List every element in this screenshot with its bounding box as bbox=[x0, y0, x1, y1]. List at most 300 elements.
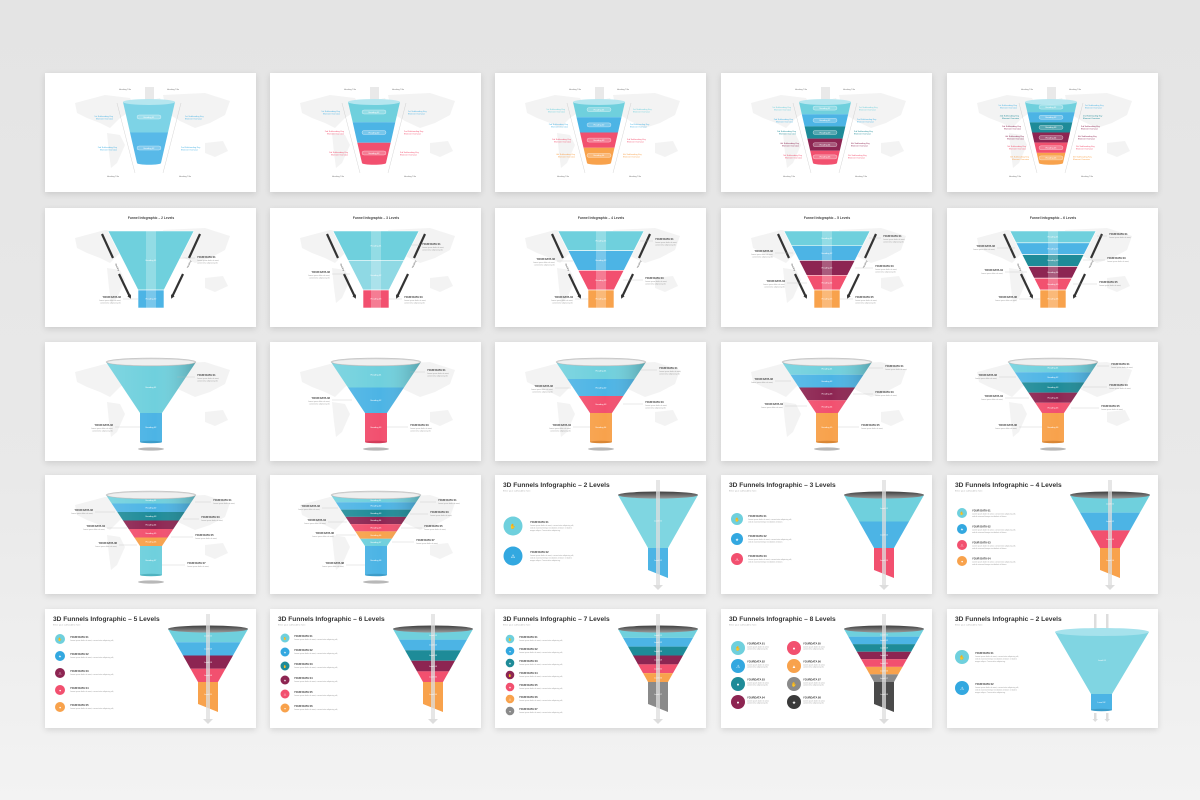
funnel: Level 01 bbox=[204, 636, 213, 638]
arrows bbox=[327, 234, 425, 297]
title: 3D Funnels Infographic – 7 Levels bbox=[503, 616, 610, 623]
data labels: Lorem ipsum dolor sit amet, bbox=[308, 400, 330, 403]
icon list: YOURDATA 08 bbox=[803, 696, 821, 700]
data labels: Lorem ipsum dolor sit amet, bbox=[213, 502, 236, 505]
funnel bbox=[844, 480, 924, 590]
icon list: ● bbox=[59, 688, 61, 692]
funnel: Heading 03 bbox=[146, 516, 157, 518]
data labels: Lorem ipsum dolor sit amet, bbox=[551, 299, 573, 302]
data labels: Lorem ipsum dolor sit amet, bbox=[549, 427, 571, 430]
data labels: YOUR DATA 01 bbox=[422, 242, 441, 246]
icon list: ⚠ bbox=[284, 692, 287, 696]
funnel: Heading 03 bbox=[596, 404, 607, 406]
side labels: Element Overview bbox=[782, 144, 799, 148]
data labels: YOUR DATA 05 bbox=[424, 524, 443, 528]
funnel bbox=[799, 87, 851, 165]
funnel: Level 08 bbox=[880, 694, 889, 696]
title: 3D Funnels Infographic – 2 Levels bbox=[955, 616, 1062, 623]
side labels: Element Overview bbox=[181, 148, 198, 152]
icon list: YOUR DATA 06 bbox=[294, 704, 313, 708]
title: Enter your subheadline here bbox=[729, 624, 757, 626]
data labels: Lorem ipsum dolor sit amet, bbox=[422, 246, 445, 249]
funnel bbox=[1025, 87, 1077, 165]
icon list: Lorem ipsum dolor sit amet, consectetur adipiscing elit, bbox=[519, 711, 563, 714]
data labels: consectetur adipiscing elit. bbox=[92, 429, 113, 432]
icon list: consectetur adipiscing elit, bbox=[803, 684, 825, 687]
side labels: 1st Subheading Key bbox=[772, 106, 792, 109]
funnel: Level 04 bbox=[1106, 560, 1115, 562]
slide: row1 col2 world funnel 3 levels bbox=[270, 73, 481, 192]
side labels: 2nd Subheading Key bbox=[630, 124, 650, 126]
title: 3D Funnels Infographic – 6 Levels bbox=[278, 616, 385, 623]
arrows: Heading bbox=[637, 260, 643, 268]
side labels: Element Overview bbox=[551, 126, 568, 128]
data labels: Lorem ipsum dolor sit amet, bbox=[761, 406, 783, 409]
side labels: 1st Subheading Key bbox=[185, 115, 205, 118]
icon list: sed do eiusmod tempor incididunt ut labore. bbox=[748, 520, 783, 524]
funnel: Heading 04 bbox=[1048, 272, 1059, 274]
data labels: YOUR DATA 04 bbox=[554, 295, 574, 299]
funnel: Heading 02 bbox=[596, 260, 607, 262]
data labels: YOUR DATA 02 bbox=[754, 249, 774, 253]
funnel: Heading 05 bbox=[1048, 408, 1059, 410]
title: 3D Funnels Infographic – 3 Levels bbox=[729, 482, 836, 489]
icon list: consectetur adipiscing elit, bbox=[803, 648, 825, 651]
funnel: Heading 01 bbox=[369, 112, 380, 114]
side labels bbox=[998, 88, 1105, 178]
icon list: ✋ bbox=[791, 681, 797, 687]
funnel bbox=[1010, 226, 1096, 310]
side labels: 1st Subheading Key bbox=[94, 115, 114, 118]
slide: row4 col4 3D funnels 3 levels bbox=[721, 475, 932, 594]
funnel: Heading 02 bbox=[820, 120, 831, 122]
title bbox=[955, 616, 1062, 626]
icon list: ● bbox=[737, 700, 740, 705]
funnel: Heading 05 bbox=[371, 528, 382, 530]
icon list: ✋ bbox=[735, 645, 741, 651]
funnel: Heading 01 bbox=[820, 108, 831, 110]
data labels: YOUR DATA 04 bbox=[764, 402, 784, 406]
slide: row2 col4 funnel 5 levels bbox=[721, 208, 932, 327]
icon list: Lorem ipsum dolor sit amet, consectetur adipiscing elit, bbox=[530, 554, 574, 557]
side labels: Element Overview bbox=[1012, 158, 1029, 161]
data labels: Lorem ipsum dolor sit amet, bbox=[195, 537, 218, 540]
funnel: Heading 02 bbox=[1048, 248, 1059, 250]
arrows bbox=[1004, 234, 1102, 297]
side labels: 3rd Subheading Key bbox=[400, 151, 420, 154]
icon list: ⚠ bbox=[960, 686, 964, 691]
side labels bbox=[94, 88, 205, 178]
data labels: YOUR DATA 08 bbox=[325, 561, 345, 565]
side labels: Heading Title bbox=[629, 175, 642, 178]
side labels: Element Overview bbox=[633, 110, 650, 114]
icon list: ★ bbox=[960, 528, 964, 532]
icon list: ⚠ bbox=[736, 664, 740, 669]
data labels: consectetur adipiscing elit. bbox=[404, 301, 426, 304]
icon list: Lorem ipsum dolor sit amet, consectetur adipiscing elit, bbox=[519, 675, 563, 678]
icon list: YOURDATA 02 bbox=[747, 660, 765, 664]
side labels bbox=[546, 88, 653, 178]
data labels: YOUR DATA 02 bbox=[534, 384, 554, 388]
funnel bbox=[844, 614, 924, 724]
icon list: YOUR DATA 02 bbox=[972, 524, 991, 528]
funnel: Heading 02 bbox=[822, 381, 833, 383]
funnel: Heading 02 bbox=[1048, 377, 1059, 379]
funnel bbox=[618, 480, 698, 590]
funnel: Level 06 bbox=[429, 694, 438, 696]
data labels bbox=[91, 373, 220, 432]
icon list: YOUR DATA 01 bbox=[530, 520, 549, 524]
side labels: Heading Title bbox=[843, 88, 856, 91]
data labels: consectetur adipiscing elit. bbox=[875, 270, 897, 273]
data labels: Lorem ipsum dolor sit amet, bbox=[201, 519, 224, 522]
side labels: Element Overview bbox=[1004, 128, 1021, 130]
funnel: Level 02 bbox=[1098, 702, 1106, 704]
title: 3D Funnels Infographic – 2 Levels bbox=[503, 482, 610, 489]
data labels: Lorem ipsum dolor sit amet, bbox=[533, 261, 555, 264]
data labels: Lorem ipsum dolor sit amet, bbox=[973, 248, 995, 251]
data labels: YOUR DATA 05 bbox=[861, 423, 880, 427]
data labels bbox=[751, 364, 908, 430]
arrows: Heading bbox=[863, 260, 869, 268]
funnel: Level 03 bbox=[880, 560, 889, 562]
data labels: Lorem ipsum dolor sit amet, bbox=[751, 381, 773, 384]
icon list: ● bbox=[284, 706, 286, 710]
data labels: YOUR DATA 07 bbox=[187, 561, 206, 565]
icon list: YOUR DATA 02 bbox=[530, 550, 549, 554]
icon list: Lorem ipsum dolor sit amet, bbox=[803, 681, 826, 684]
icon list: Lorem ipsum dolor sit amet, bbox=[803, 645, 826, 648]
funnel bbox=[348, 87, 400, 165]
icon list: ★ bbox=[735, 537, 739, 542]
side labels: 4th Subheading Key bbox=[556, 153, 576, 156]
data labels: YOUR DATA 01 bbox=[213, 498, 232, 502]
funnel: Heading 02 bbox=[146, 427, 157, 429]
funnel: Heading 02 bbox=[594, 125, 605, 127]
data labels: YOUR DATA 04 bbox=[552, 423, 572, 427]
side labels: 1st Subheading Key bbox=[998, 104, 1018, 107]
icon list: ● bbox=[737, 682, 740, 687]
side labels: Element Overview bbox=[1002, 117, 1019, 120]
funnel: Heading 02 bbox=[1046, 117, 1057, 119]
data labels: consectetur adipiscing elit. bbox=[410, 429, 432, 432]
data labels: Lorem ipsum dolor sit amet, bbox=[981, 272, 1003, 275]
data labels: consectetur adipiscing elit. bbox=[309, 276, 330, 279]
data labels bbox=[973, 232, 1132, 302]
icon list: Lorem ipsum dolor sit amet, consectetur adipiscing elit, bbox=[70, 639, 114, 642]
side labels: Element Overview bbox=[554, 140, 571, 144]
slide: row2 col1 funnel 2 levels bbox=[45, 208, 256, 327]
icon list: ✋ bbox=[510, 523, 516, 530]
data labels: YOUR DATA 01 bbox=[655, 237, 674, 241]
icon list: YOUR DATA 04 bbox=[70, 686, 89, 690]
icon list: sed do eiusmod tempor incididunt ut labore. bbox=[972, 531, 1007, 534]
icon list: Lorem ipsum dolor sit amet, consectetur adipiscing elit, bbox=[972, 512, 1016, 516]
funnel: Heading 03 bbox=[371, 513, 382, 515]
icon list: YOURDATA 01 bbox=[747, 642, 765, 646]
funnel bbox=[1070, 480, 1150, 590]
data labels: YOUR DATA 04 bbox=[766, 279, 786, 283]
slide: row5 col1 3D funnels 5 levels bbox=[45, 609, 256, 728]
title: Enter your subheadline here bbox=[955, 624, 983, 626]
data labels: Lorem ipsum dolor sit amet, bbox=[197, 377, 220, 380]
data labels bbox=[533, 237, 678, 304]
funnel: Level 02 bbox=[654, 642, 663, 644]
funnel bbox=[573, 87, 625, 165]
data labels: YOUR DATA 04 bbox=[86, 524, 106, 528]
data labels: YOUR DATA 06 bbox=[998, 295, 1018, 299]
data labels: YOUR DATA 01 bbox=[659, 366, 678, 370]
icon list: ⚠ bbox=[960, 544, 964, 548]
title: Enter your subheadline here bbox=[278, 624, 306, 626]
funnel: Heading 07 bbox=[371, 542, 382, 544]
data labels: Lorem ipsum dolor sit amet, bbox=[981, 398, 1003, 401]
funnel: Heading 03 bbox=[820, 132, 831, 134]
side labels: Element Overview bbox=[327, 132, 344, 136]
data labels: YOUR DATA 02 bbox=[536, 257, 556, 261]
side labels: 1st Subheading Key bbox=[408, 110, 428, 113]
funnel: Level 01 bbox=[1106, 504, 1115, 506]
side labels: 1st Subheading Key bbox=[1085, 104, 1105, 107]
data labels: Lorem ipsum dolor sit amet, bbox=[645, 404, 668, 407]
side labels: Element Overview bbox=[623, 156, 640, 158]
funnel: Heading 05 bbox=[822, 298, 833, 300]
icon list: Lorem ipsum dolor sit amet, consectetur adipiscing elit, bbox=[975, 686, 1019, 689]
data labels: consectetur adipiscing elit. bbox=[645, 406, 667, 409]
data labels: consectetur adipiscing elit. bbox=[427, 374, 449, 377]
funnel: Heading 02 bbox=[146, 508, 157, 510]
icon list: YOUR DATA 02 bbox=[294, 648, 313, 652]
funnel: Heading 04 bbox=[1046, 137, 1057, 139]
icon list: YOURDATA 07 bbox=[803, 678, 821, 682]
icon list bbox=[955, 650, 1019, 695]
funnel: Level 03 bbox=[654, 651, 663, 653]
funnel: Heading 01 bbox=[144, 117, 155, 119]
side labels: Element Overview bbox=[848, 156, 865, 160]
funnel: Heading 02 bbox=[146, 298, 157, 300]
icon list: ★ bbox=[509, 661, 512, 665]
data labels bbox=[298, 498, 461, 568]
title: Funnel Infographic – 4 Levels bbox=[578, 216, 624, 220]
icon list: YOUR DATA 05 bbox=[294, 690, 313, 694]
icon list: Lorem ipsum dolor sit amet, bbox=[747, 699, 770, 702]
side labels: Heading Title bbox=[1081, 175, 1094, 178]
funnel bbox=[333, 226, 419, 310]
title: Enter your subheadline here bbox=[503, 624, 531, 626]
side labels: 2nd Subheading Key bbox=[774, 119, 794, 121]
icon list: Lorem ipsum dolor sit amet, consectetur adipiscing elit, bbox=[975, 655, 1019, 658]
icon list: YOUR DATA 01 bbox=[294, 634, 313, 638]
funnel: Heading 02 bbox=[822, 253, 833, 255]
side labels: Heading Title bbox=[179, 175, 192, 178]
data labels: consectetur adipiscing elit. bbox=[645, 282, 667, 285]
data labels: YOUR DATA 05 bbox=[1099, 280, 1118, 284]
title: Enter your subheadline here bbox=[955, 490, 983, 492]
funnel bbox=[123, 87, 175, 165]
icon list: YOUR DATA 06 bbox=[519, 695, 538, 699]
side labels: 1st Subheading Key bbox=[321, 110, 341, 113]
data labels: YOUR DATA 03 bbox=[404, 295, 423, 299]
icon list bbox=[731, 641, 826, 709]
icon list: Lorem ipsum dolor sit amet, consectetur adipiscing elit, bbox=[70, 673, 114, 676]
icon list: YOUR DATA 07 bbox=[519, 707, 538, 711]
funnel: Heading 04 bbox=[146, 524, 157, 526]
side labels: 4th Subheading Key bbox=[780, 142, 800, 145]
funnel bbox=[618, 614, 698, 724]
side labels: 2nd Subheading Key bbox=[98, 147, 118, 149]
side labels: Heading Title bbox=[1069, 88, 1082, 91]
side labels: Element Overview bbox=[323, 112, 340, 116]
side labels: Element Overview bbox=[1083, 117, 1100, 120]
funnel bbox=[108, 226, 194, 310]
data labels: Lorem ipsum dolor sit amet, bbox=[875, 394, 898, 397]
side labels: Heading Title bbox=[783, 175, 796, 178]
slide: row3 col3 3d funnel 4 levels bbox=[495, 342, 706, 461]
icon list: YOUR DATA 02 bbox=[975, 682, 994, 686]
data labels: YOUR DATA 02 bbox=[74, 508, 94, 512]
funnel: Level 03 bbox=[429, 655, 438, 657]
data labels: Lorem ipsum dolor sit amet, bbox=[71, 512, 93, 515]
data labels: Lorem ipsum dolor sit amet, bbox=[763, 283, 785, 286]
funnel: Heading 03 bbox=[822, 394, 833, 396]
icon list: ★ bbox=[509, 685, 512, 689]
data labels: Lorem ipsum dolor sit amet, bbox=[95, 545, 117, 548]
data labels bbox=[308, 368, 450, 432]
funnel: Level 02 bbox=[429, 645, 438, 647]
title: Funnel Infographic – 2 Levels bbox=[128, 216, 174, 220]
icon list: consectetur adipiscing elit, bbox=[747, 684, 769, 687]
data labels: Lorem ipsum dolor sit amet, bbox=[430, 514, 453, 517]
data labels: consectetur adipiscing elit. bbox=[752, 255, 773, 258]
icon list: YOUR DATA 02 bbox=[70, 652, 89, 656]
side labels: 3rd Subheading Key bbox=[777, 130, 797, 133]
icon list: Lorem ipsum dolor sit amet, consectetur adipiscing elit, bbox=[294, 680, 338, 683]
side labels: Element Overview bbox=[857, 120, 874, 124]
data labels: YOUR DATA 02 bbox=[978, 373, 998, 377]
icon list: YOUR DATA 03 bbox=[519, 659, 538, 663]
icon list: ⚠ bbox=[735, 557, 739, 562]
title bbox=[503, 482, 610, 492]
funnel: Heading 01 bbox=[371, 246, 382, 248]
icon list: sed do eiusmod tempor incididunt ut labore. bbox=[748, 540, 783, 544]
data labels: consectetur adipiscing elit. bbox=[764, 285, 785, 288]
side labels: 2nd Subheading Key bbox=[857, 119, 877, 121]
data labels: consectetur adipiscing elit. bbox=[309, 402, 330, 405]
icon list: YOURDATA 04 bbox=[747, 696, 765, 700]
side labels: 3rd Subheading Key bbox=[1081, 125, 1101, 128]
icon list bbox=[280, 634, 338, 712]
side labels: Heading Title bbox=[107, 175, 120, 178]
slide: row5 col3 3D funnels 7 levels bbox=[495, 609, 706, 728]
side labels bbox=[772, 88, 879, 178]
funnel: Level 02 bbox=[880, 640, 889, 642]
data labels: YOUR DATA 01 bbox=[1111, 362, 1130, 366]
data labels: Lorem ipsum dolor sit amet, bbox=[404, 299, 427, 302]
funnel bbox=[393, 614, 473, 724]
funnel: Heading 05 bbox=[822, 427, 833, 429]
data labels: Lorem ipsum dolor sit amet, bbox=[875, 268, 898, 271]
icon list: ✋ bbox=[959, 654, 965, 660]
data labels: YOUR DATA 01 bbox=[197, 255, 216, 259]
data labels: Lorem ipsum dolor sit amet, bbox=[975, 377, 997, 380]
icon list: ● bbox=[793, 646, 796, 651]
side labels: Element Overview bbox=[1078, 138, 1095, 140]
funnel: Heading 04 bbox=[1048, 397, 1059, 399]
arrows: Heading bbox=[114, 264, 120, 272]
side labels: Heading Title bbox=[119, 88, 132, 91]
data labels: Lorem ipsum dolor sit amet, bbox=[424, 528, 447, 531]
data labels: Lorem ipsum dolor sit amet, bbox=[438, 502, 461, 505]
slide: row5 col4 3D funnels 8 levels bbox=[721, 609, 932, 728]
slide: row5 col5 3D funnels 2 levels wide bbox=[947, 609, 1158, 728]
funnel: Heading 01 bbox=[146, 500, 157, 502]
funnel: Heading 01 bbox=[1048, 368, 1059, 370]
funnel: Heading 02 bbox=[369, 132, 380, 134]
side labels: 3rd Subheading Key bbox=[329, 151, 349, 154]
icon list: YOUR DATA 01 bbox=[748, 514, 767, 518]
side labels: Element Overview bbox=[854, 132, 871, 136]
slide: row1 col5 world funnel 6 levels bbox=[947, 73, 1158, 192]
funnel bbox=[784, 226, 870, 310]
icon list bbox=[55, 634, 114, 712]
icon list: consectetur adipiscing elit, bbox=[747, 702, 769, 705]
data labels: Lorem ipsum dolor sit amet, bbox=[1111, 366, 1134, 369]
data labels: YOUR DATA 04 bbox=[307, 518, 327, 522]
side labels: 1st Subheading Key bbox=[633, 108, 653, 111]
icon list: Lorem ipsum dolor sit amet, consectetur adipiscing elit, bbox=[70, 707, 114, 710]
icon list: ★ bbox=[792, 700, 796, 705]
data labels: Lorem ipsum dolor sit amet, bbox=[659, 370, 682, 373]
side labels: Heading Title bbox=[167, 88, 180, 91]
data labels: Lorem ipsum dolor sit amet, bbox=[416, 542, 439, 545]
side labels: 5th Subheading Key bbox=[848, 154, 868, 157]
funnel bbox=[106, 358, 196, 451]
side labels: Element Overview bbox=[558, 156, 575, 158]
icon list: YOUR DATA 02 bbox=[519, 647, 538, 651]
icon list: ✋ bbox=[508, 673, 512, 677]
icon list: YOUR DATA 03 bbox=[972, 540, 991, 544]
arrows: Heading bbox=[1016, 264, 1022, 272]
data labels: YOUR DATA 01 bbox=[883, 234, 902, 238]
title: 3D Funnels Infographic – 8 Levels bbox=[729, 616, 836, 623]
icon list: YOUR DATA 04 bbox=[972, 556, 991, 560]
icon list: ★ bbox=[284, 650, 287, 654]
icon list: Lorem ipsum dolor sit amet, bbox=[803, 663, 826, 666]
funnel: Level 05 bbox=[204, 694, 213, 696]
data labels: YOUR DATA 04 bbox=[984, 394, 1004, 398]
side labels: Heading Title bbox=[1009, 175, 1022, 178]
side labels: 6th Subheading Key bbox=[1010, 156, 1030, 158]
funnel: Level 04 bbox=[880, 655, 889, 657]
data labels: YOUR DATA 06 bbox=[998, 423, 1018, 427]
icon list: ✋ bbox=[735, 517, 740, 522]
icon list: magna aliqua. Consectetur adipiscing. bbox=[530, 529, 561, 532]
side labels: Element Overview bbox=[400, 154, 417, 156]
funnel: Level 04 bbox=[429, 666, 438, 668]
funnel: Heading 07 bbox=[146, 560, 157, 562]
side labels: Element Overview bbox=[627, 140, 644, 144]
funnel bbox=[782, 358, 872, 451]
side labels: Element Overview bbox=[1009, 148, 1026, 150]
slide: row5 col2 3D funnels 6 levels bbox=[270, 609, 481, 728]
funnel bbox=[106, 491, 196, 584]
funnel: Level 05 bbox=[429, 676, 438, 678]
icon list: ✋ bbox=[283, 636, 287, 640]
title: Funnel Infographic – 6 Levels bbox=[1030, 216, 1076, 220]
icon list: sed do eiusmod tempor incididunt ut labore et dolore bbox=[530, 526, 572, 530]
funnel: Heading 06 bbox=[371, 535, 382, 537]
data labels: consectetur adipiscing elit. bbox=[659, 372, 681, 375]
